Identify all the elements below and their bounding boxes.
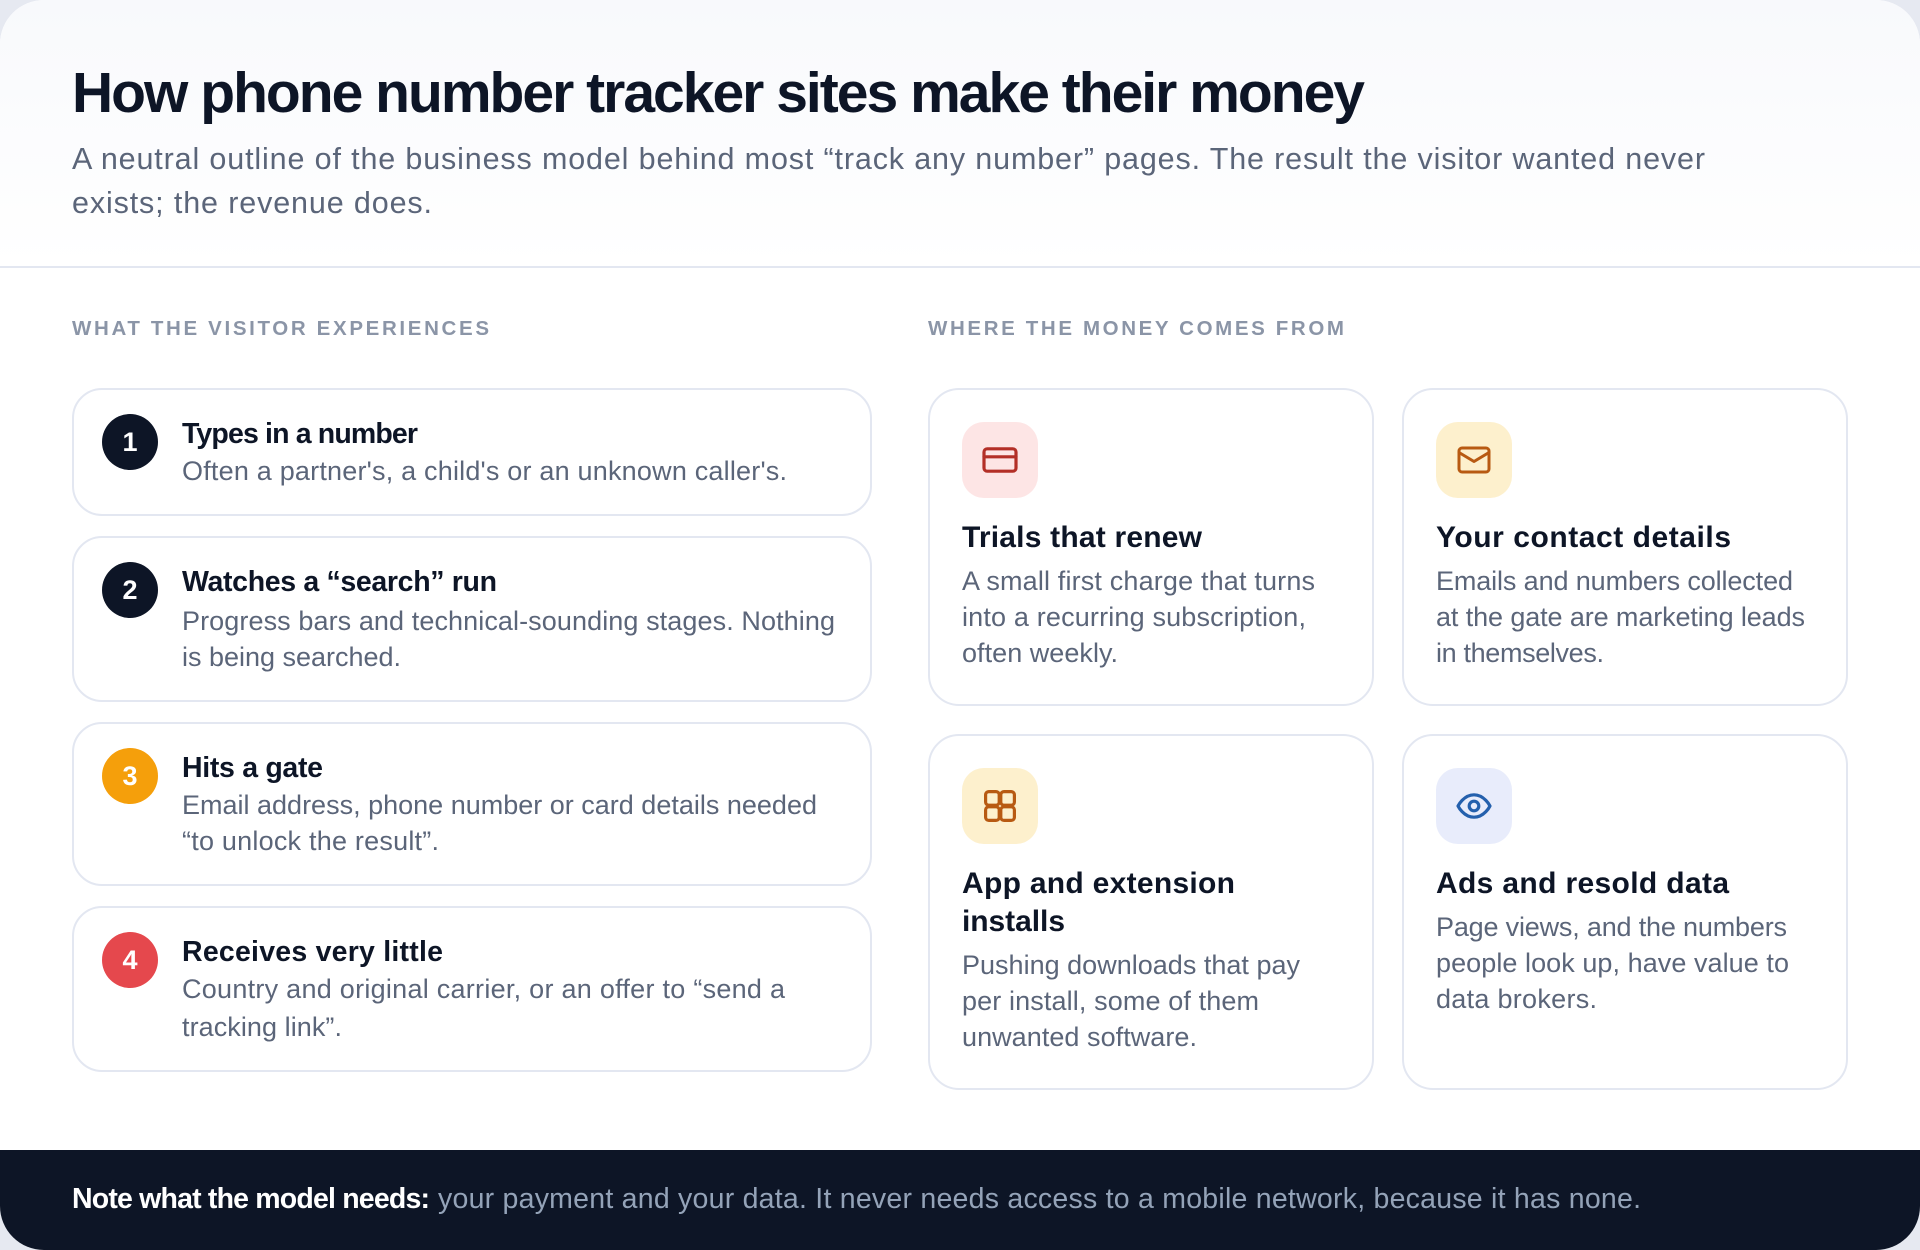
card: ads and resold data [1403, 735, 1847, 1089]
step 3 card: Hits a gate [182, 752, 323, 784]
step 1 card: 1 [122, 427, 138, 457]
subtitle: exists; the revenue does. [72, 186, 432, 220]
card: contact details: at the gate are marketing leads [1436, 602, 1805, 632]
step 2 card [73, 537, 871, 701]
panel: step list [73, 389, 871, 1071]
card: trials that renew [929, 389, 1373, 705]
panel: revenue sources [929, 389, 1847, 1089]
step 4 card: Country and original carrier, or an offer to “send a [182, 974, 786, 1004]
card: trials that renew: often weekly. [962, 638, 1118, 668]
step 3 card: 3 [122, 761, 138, 791]
icon: eye [1436, 768, 1512, 844]
card: ads and resold data: data brokers. [1436, 984, 1597, 1014]
step 4 card [73, 907, 871, 1071]
step 1 card: Often a partner's, a child's or an unknown caller's. [182, 456, 787, 486]
card: trials that renew: A small first charge that turns [962, 566, 1315, 596]
step 3 card: Email address, phone number or card details needed [182, 790, 817, 820]
icon: envelope [1436, 422, 1512, 498]
step 1 card: Types in a number [182, 418, 418, 450]
icon: credit card [962, 422, 1038, 498]
card: ads and resold data: Page views, and the numbers [1436, 912, 1787, 942]
card: contact details [1403, 389, 1847, 705]
footer note [0, 1150, 1920, 1250]
card: app and extension installs: per install, some of them [962, 986, 1259, 1016]
step 4 card: tracking link”. [182, 1012, 342, 1042]
card: trials that renew: into a recurring subscription, [962, 602, 1306, 632]
subtitle: A neutral outline of the business model behind most “track any number” pages. The result the visitor wanted never [72, 142, 1705, 176]
card: app and extension installs: installs [962, 905, 1065, 938]
subtitle [72, 142, 1705, 220]
step 2 card: 2 [122, 575, 138, 605]
step 4 card: Receives very little [182, 936, 443, 968]
card: app and extension installs: Pushing downloads that pay [962, 950, 1300, 980]
card: ads and resold data: people look up, have value to [1436, 948, 1789, 978]
step 2 card: is being searched. [182, 642, 401, 672]
card: trials that renew: Trials that renew [962, 521, 1203, 554]
title: How phone number tracker sites make their money [72, 61, 1365, 125]
card: contact details: in themselves. [1436, 638, 1604, 668]
step 4 card: 4 [122, 945, 138, 975]
footer note: Note what the model needs: [72, 1183, 430, 1215]
step 1 card [73, 389, 871, 515]
header band [0, 0, 1920, 268]
icon: app grid [962, 768, 1038, 844]
section heading: visitor experience: WHAT THE VISITOR EXPERIENCES [72, 317, 489, 340]
step 2 card: Progress bars and technical-sounding stages. Nothing [182, 606, 835, 636]
step 3 card [73, 723, 871, 885]
step 2 card: Watches a “search” run [182, 566, 497, 598]
card: app and extension installs [929, 735, 1373, 1089]
step 3 card: “to unlock the result”. [182, 826, 439, 856]
card: app and extension installs: App and extension [962, 867, 1235, 900]
section heading: money sources: WHERE THE MONEY COMES FROM [928, 317, 1344, 340]
footer note: your payment and your data. It never needs access to a mobile network, because it has none. [438, 1183, 1641, 1215]
card: contact details: Emails and numbers collected [1436, 566, 1793, 596]
card: ads and resold data: Ads and resold data [1436, 867, 1729, 900]
card: app and extension installs: unwanted software. [962, 1022, 1197, 1052]
card: contact details: Your contact details [1436, 521, 1731, 554]
